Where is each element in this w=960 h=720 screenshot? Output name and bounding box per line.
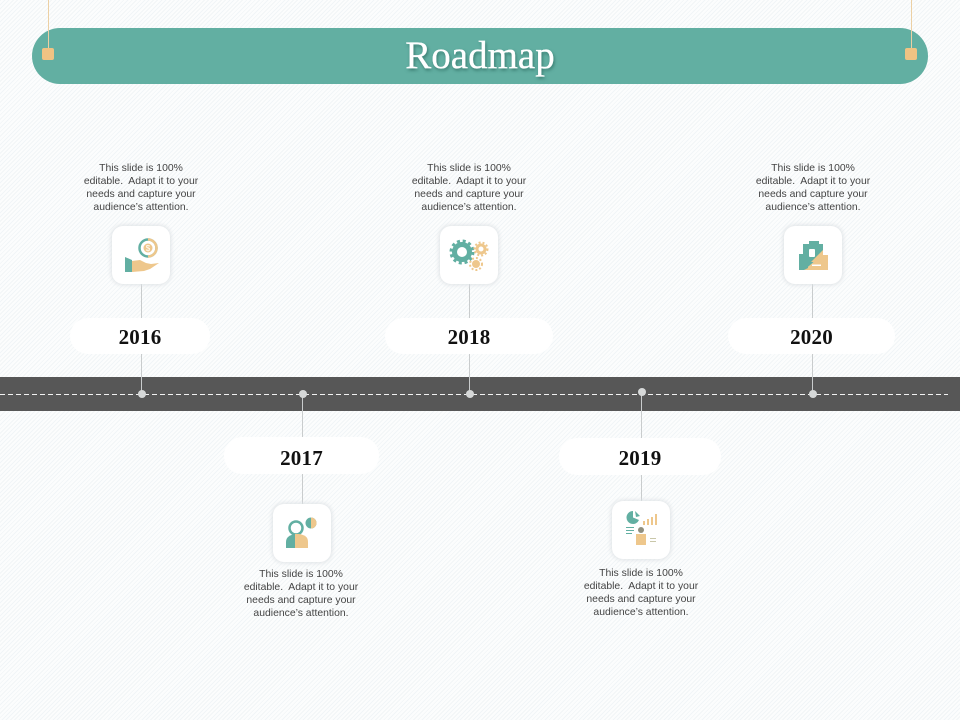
right hanger xyxy=(905,0,917,60)
year 2018 xyxy=(385,318,553,354)
left hanger xyxy=(42,0,54,60)
description 2017: editable. Adapt it to your xyxy=(244,582,358,593)
description 2019: This slide is 100% xyxy=(599,568,683,578)
icon: gears xyxy=(440,226,498,284)
description 2018 xyxy=(412,162,526,212)
timeline road xyxy=(0,377,960,411)
description 2020: audience’s attention. xyxy=(765,202,861,212)
milestone 2017 xyxy=(224,390,379,619)
milestone 2019 xyxy=(559,388,721,618)
year 2020: 2020 xyxy=(790,325,833,349)
node 2016 xyxy=(138,390,146,398)
icon: clipboard and folder xyxy=(784,226,842,284)
milestone 2020 xyxy=(728,162,895,398)
description 2020: needs and capture your xyxy=(758,188,868,200)
description 2019: editable. Adapt it to your xyxy=(584,580,698,592)
description 2019 xyxy=(584,568,698,618)
description 2018: needs and capture your xyxy=(414,188,524,200)
milestone 2018 xyxy=(385,162,553,398)
description 2016 xyxy=(84,162,198,212)
description 2016: audience’s attention. xyxy=(93,202,189,212)
icon: analytics presenter xyxy=(612,501,670,559)
node 2018 xyxy=(466,390,474,398)
year 2016 xyxy=(70,318,210,354)
description 2019: needs and capture your xyxy=(586,594,696,604)
year 2020 xyxy=(728,318,895,354)
icon: hand holding coin: $ xyxy=(146,244,151,253)
year 2017: 2017 xyxy=(280,446,323,470)
description 2020: This slide is 100% xyxy=(771,162,855,174)
description 2017 xyxy=(244,569,358,619)
title banner xyxy=(32,28,928,84)
description 2020 xyxy=(756,162,870,212)
description 2016: This slide is 100% xyxy=(99,162,183,174)
description 2016: editable. Adapt it to your xyxy=(84,176,198,186)
description 2019: audience’s attention. xyxy=(593,606,689,618)
year 2017 xyxy=(224,437,379,474)
description 2018: editable. Adapt it to your xyxy=(412,176,526,186)
icon: person with badge xyxy=(273,504,331,562)
year 2016: 2016 xyxy=(119,325,161,349)
year 2018: 2018 xyxy=(448,325,490,349)
title: Roadmap xyxy=(405,34,555,77)
node 2017 xyxy=(298,390,306,398)
description 2018: audience’s attention. xyxy=(421,202,517,212)
year 2019 xyxy=(559,438,721,475)
node 2020 xyxy=(808,390,816,398)
milestone 2016 xyxy=(70,162,210,398)
description 2016: needs and capture your xyxy=(86,188,196,200)
description 2017: needs and capture your xyxy=(246,595,356,606)
icon: hand holding coin xyxy=(112,226,170,284)
description 2018: This slide is 100% xyxy=(427,162,511,174)
node 2019 xyxy=(638,388,646,396)
description 2017: This slide is 100% xyxy=(259,569,343,580)
description 2020: editable. Adapt it to your xyxy=(756,176,870,186)
year 2019: 2019 xyxy=(619,446,661,470)
description 2017: audience’s attention. xyxy=(253,608,349,619)
